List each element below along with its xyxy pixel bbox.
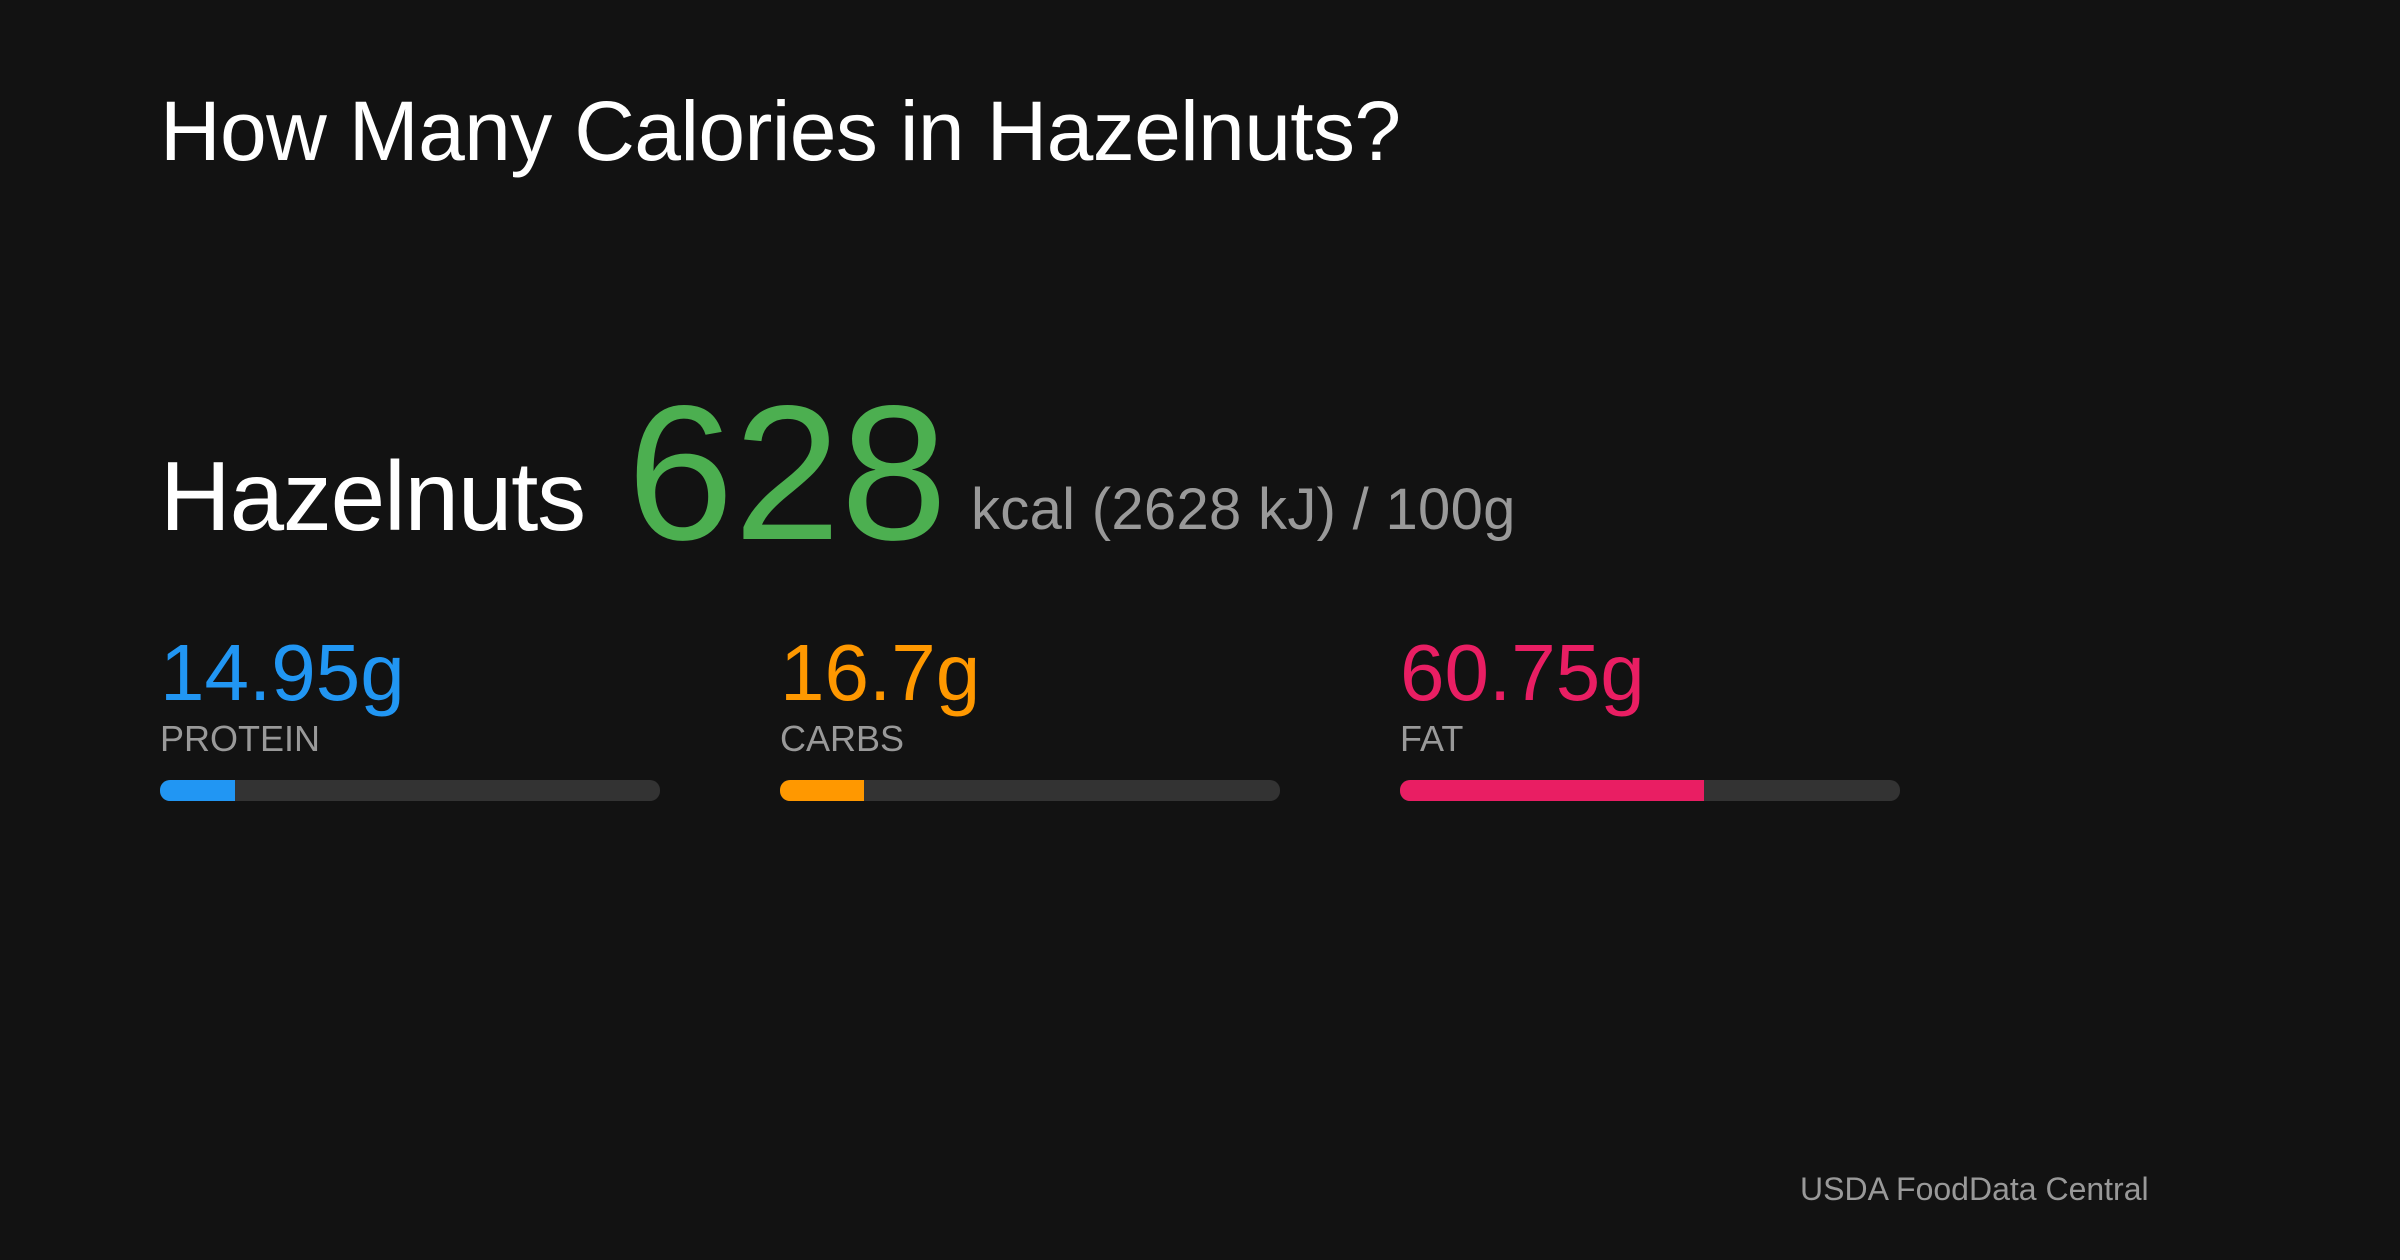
fat bar: [1400, 780, 1900, 801]
fat value: 60.75g: [1400, 628, 1645, 717]
food name: Hazelnuts: [160, 441, 585, 551]
carbs label: CARBS: [780, 718, 904, 759]
carbs bar: [780, 780, 1280, 801]
protein bar: [160, 780, 660, 801]
panel: fat: [1400, 628, 1900, 801]
title: How Many Calories in Hazelnuts?: [160, 84, 1400, 178]
panel: protein: [160, 628, 660, 801]
protein value: 14.95g: [160, 628, 405, 717]
protein label: PROTEIN: [160, 718, 320, 759]
source credit: USDA FoodData Central: [1800, 1171, 2149, 1207]
carbs value: 16.7g: [780, 628, 980, 717]
panel: carbs: [780, 628, 1280, 801]
energy unit text: kcal (2628 kJ) / 100g: [971, 477, 1516, 542]
calorie number: 628: [627, 365, 947, 580]
fat label: FAT: [1400, 718, 1463, 759]
